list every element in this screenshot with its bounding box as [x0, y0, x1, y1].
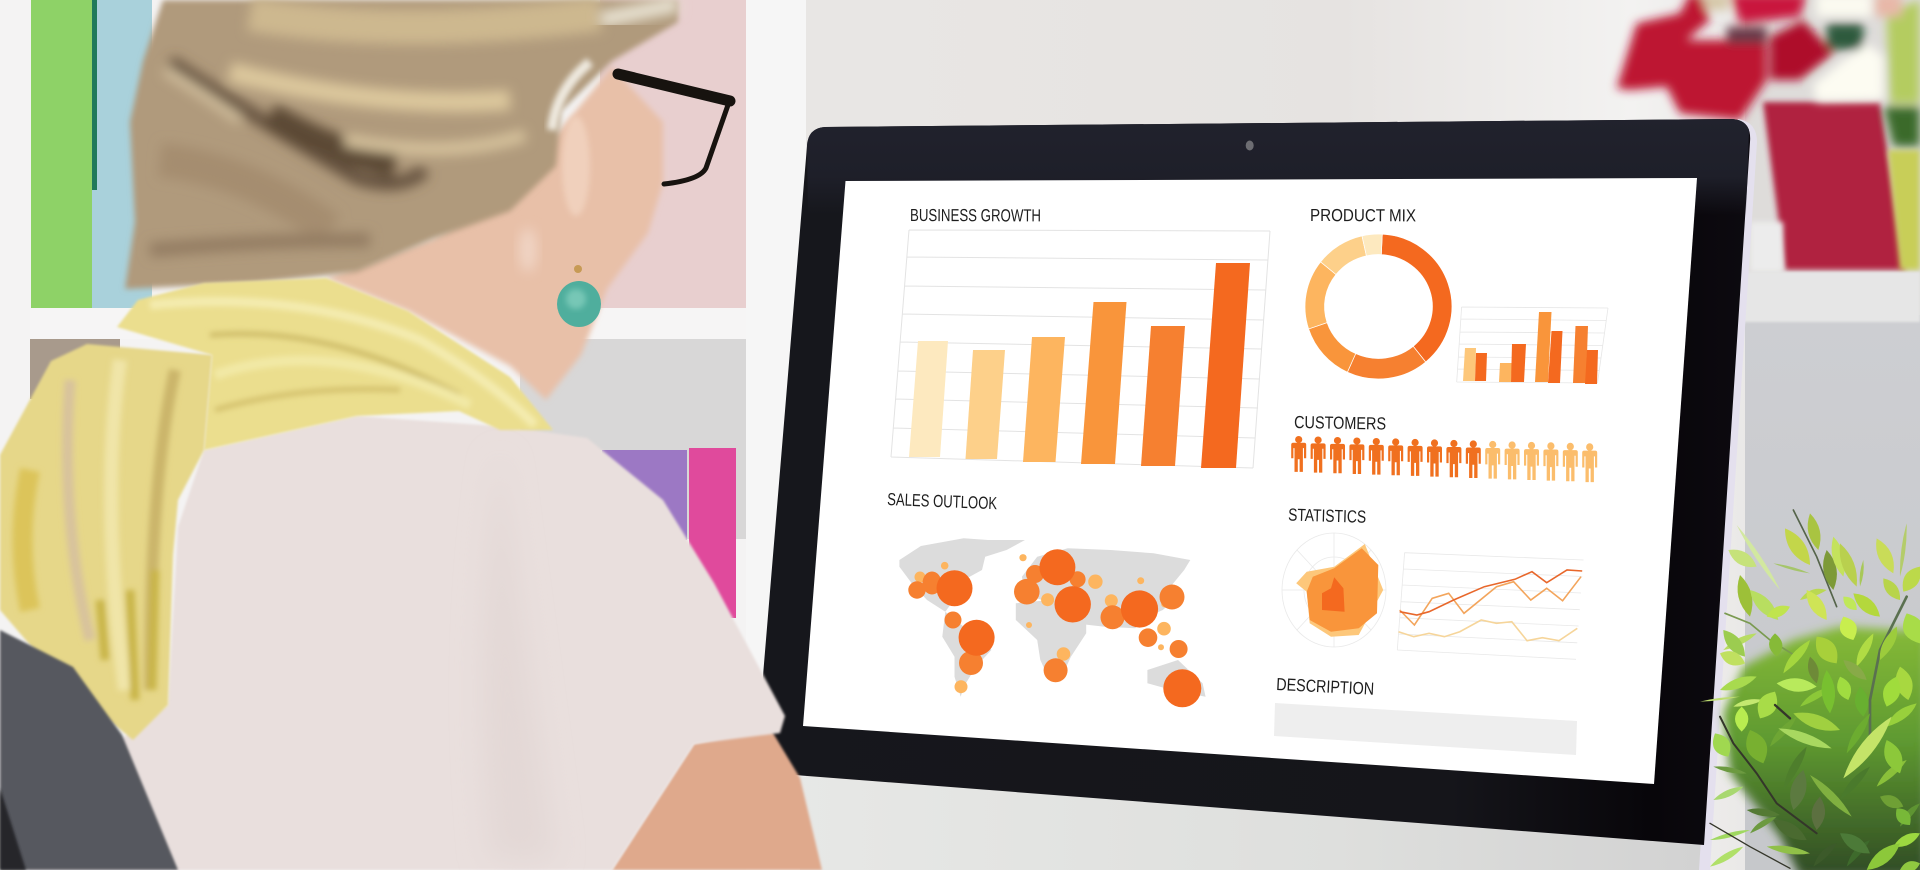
background plant leaves [1723, 589, 1920, 867]
chair [0, 630, 178, 870]
monitor bezel [755, 119, 1750, 845]
bezel top highlight [807, 119, 1749, 215]
small bar chart [1457, 307, 1608, 384]
neck and face [326, 67, 663, 400]
red poinsettia and pots [1617, 0, 1920, 322]
bar chart [909, 263, 1250, 468]
heading: customers: CUSTOMERS [1294, 412, 1386, 434]
binder: pink [689, 448, 736, 618]
heading: business growth: BUSINESS GROWTH [910, 205, 1041, 225]
scarf folds [22, 302, 535, 700]
earring [557, 265, 601, 327]
donut chart [1305, 234, 1452, 379]
shelf [1735, 272, 1920, 322]
map bubbles: large [936, 549, 1201, 707]
line chart [1397, 553, 1584, 659]
monitor silver body [785, 119, 1757, 870]
yellow pot [1888, 150, 1920, 270]
panel: sales outlook [887, 489, 1206, 707]
ear [562, 116, 590, 216]
panel: product mix [1305, 205, 1608, 384]
neck highlight [519, 228, 537, 272]
plant stems [1725, 510, 1907, 743]
plant leaves [1700, 513, 1920, 870]
heading: sales outlook: SALES OUTLOOK [887, 489, 998, 513]
map bubbles: small [914, 554, 1171, 693]
dark plant twigs [1710, 705, 1817, 868]
scarf [0, 278, 553, 740]
red pot [1763, 102, 1905, 270]
radar chart [1282, 533, 1386, 647]
panel: description [1274, 674, 1577, 755]
bar chart grid [891, 230, 1270, 468]
panel: business growth [891, 205, 1270, 468]
arm [612, 728, 822, 870]
pictogram row of people [1291, 436, 1597, 482]
description placeholder bar [1274, 703, 1577, 755]
glasses [618, 74, 730, 184]
map bubbles: medium [908, 565, 1188, 682]
shirt [120, 416, 785, 870]
screen [803, 178, 1697, 784]
panel: statistics [1282, 505, 1584, 659]
plant [1700, 510, 1920, 870]
binder: purple [602, 450, 687, 540]
plant foliage mass [1723, 627, 1920, 870]
webcam [1246, 140, 1254, 150]
woman [0, 0, 822, 870]
blurred flower and foliage [1617, 0, 1920, 147]
white box on shelf [1750, 222, 1783, 272]
world map land [899, 538, 1206, 697]
bookcase on the left [0, 0, 806, 870]
heading: statistics: STATISTICS [1288, 505, 1366, 527]
heading: description: DESCRIPTION [1276, 674, 1375, 699]
heading: product mix: PRODUCT MIX [1310, 205, 1416, 225]
hair [125, 0, 678, 289]
panel: customers [1291, 412, 1597, 482]
